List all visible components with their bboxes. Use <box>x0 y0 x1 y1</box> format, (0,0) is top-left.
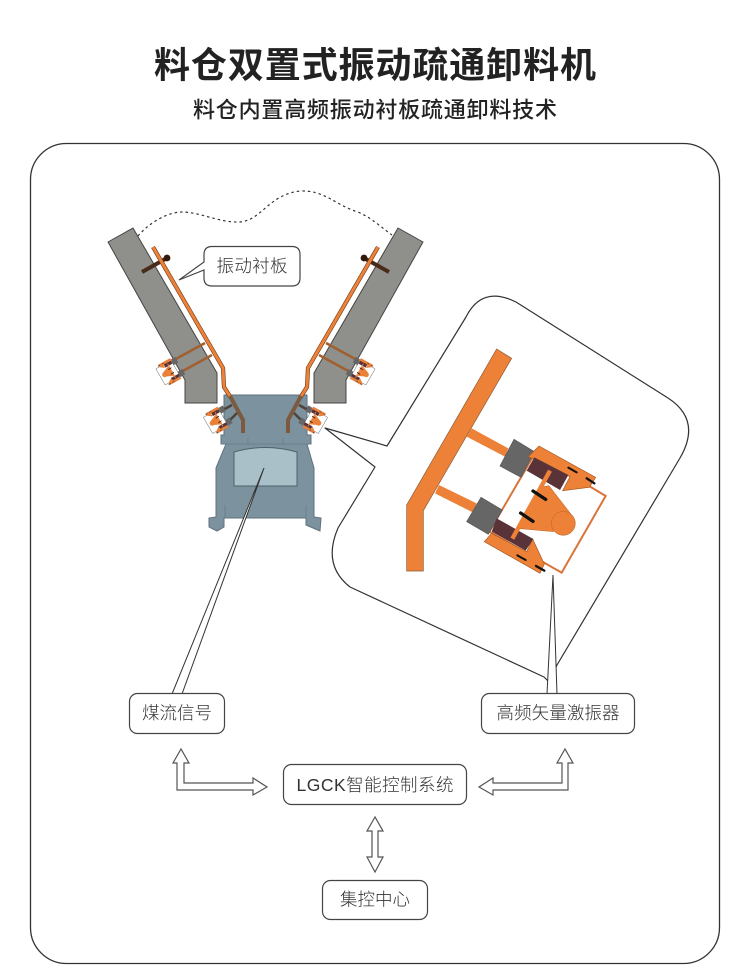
leader: coal flow signal <box>172 468 264 694</box>
upper exciter <box>156 357 185 385</box>
exciter <box>467 439 606 573</box>
arrow: control to central <box>367 817 383 872</box>
lower rods <box>223 405 308 420</box>
box: coal flow signal <box>130 694 224 734</box>
left liner plate <box>153 247 243 433</box>
connecting rods <box>467 428 508 457</box>
vibrating liner plates <box>153 247 378 433</box>
lower left exciter <box>203 405 233 434</box>
box: LGCK control system <box>284 764 466 804</box>
box: central control <box>322 880 428 920</box>
callout: vibrating liner: 振动衬板 <box>216 256 288 276</box>
liner plate <box>407 349 512 571</box>
box: LGCK control system: LGCK智能控制系统 <box>296 775 454 795</box>
callout: vibrating liner <box>179 246 300 286</box>
hopper outlet body <box>209 395 321 531</box>
right hopper wall with vibrating liner <box>314 228 423 403</box>
dotted material outline <box>138 191 392 236</box>
arrow: control to exciter <box>479 749 573 795</box>
box: high-frequency vector exciter: 高频矢量激振器 <box>496 703 620 723</box>
magnified exciter detail <box>407 349 606 573</box>
body detail lines <box>221 438 311 517</box>
left hopper wall with vibrating liner <box>108 228 217 403</box>
arrow: signal to control <box>173 749 267 795</box>
left hopper wall <box>108 228 217 403</box>
upper connecting rods <box>174 343 212 372</box>
observation window <box>234 448 297 486</box>
box: central control: 集控中心 <box>340 890 410 910</box>
title: 料仓双置式振动疏通卸料机 <box>154 44 596 86</box>
lower right exciter <box>298 405 328 434</box>
magnified detail bubble <box>325 296 689 682</box>
leader: exciter <box>547 575 557 694</box>
panel: main frame <box>30 144 720 964</box>
box: high-frequency vector exciter <box>482 694 634 734</box>
anchor bolt <box>142 255 170 272</box>
right liner plate <box>288 247 378 433</box>
subtitle: 料仓内置高频振动衬板疏通卸料技术 <box>193 98 557 122</box>
box: coal flow signal: 煤流信号 <box>142 703 212 723</box>
lower exciters <box>203 405 328 434</box>
